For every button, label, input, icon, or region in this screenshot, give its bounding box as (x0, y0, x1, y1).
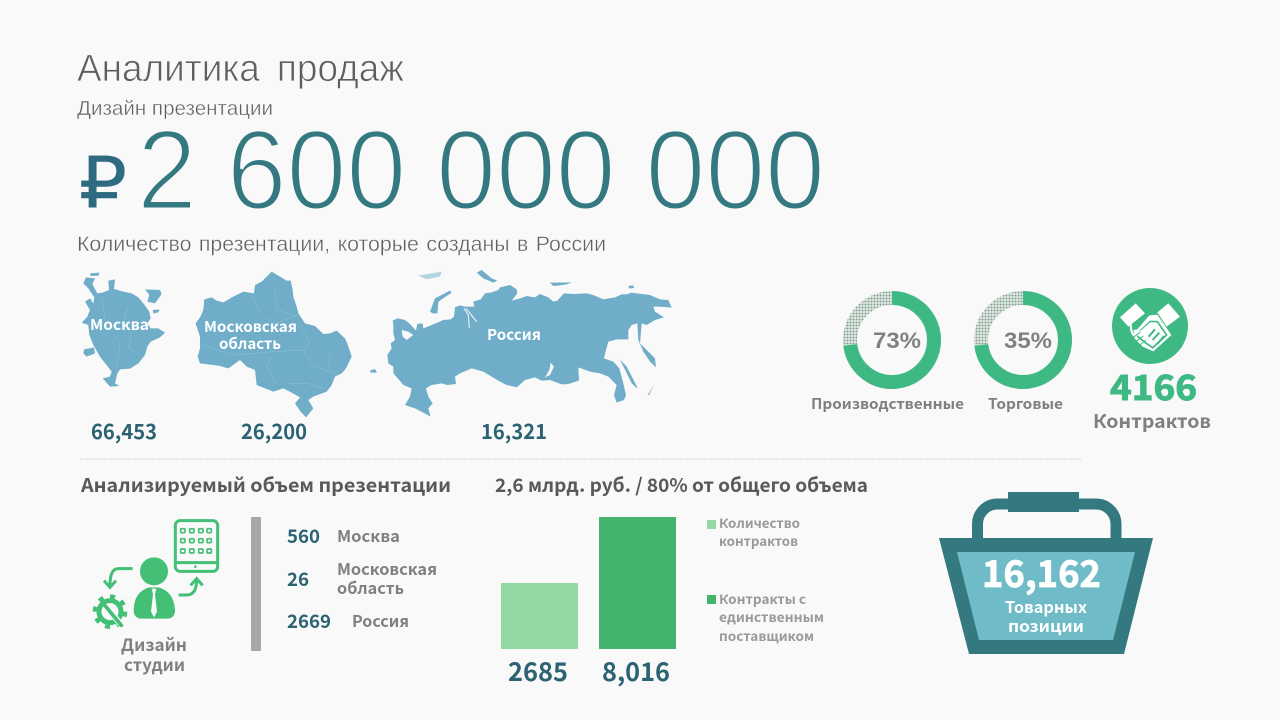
list: volumes: Московская (337, 556, 437, 580)
bar chart: 2685 (508, 652, 568, 689)
value: Russia: 16,321 (481, 416, 547, 446)
donut: 73%: 73% (873, 328, 921, 353)
legend: контрактов (719, 531, 798, 550)
heading: share of total: 2,6 млрд. руб. / 80% от общего объема (495, 471, 868, 498)
donut: 73% (850, 298, 934, 382)
vertical bar (251, 517, 261, 651)
basket: 16,162 (982, 544, 1101, 598)
donut: 35%: 35% (1004, 328, 1052, 353)
map: Moscow (82, 273, 165, 387)
list: volumes: область (337, 575, 404, 599)
icon: ruble sign: ₽ (79, 142, 127, 224)
label: trade: Торговые (988, 393, 1063, 414)
donut: 35% (981, 298, 1065, 382)
list: volumes (287, 522, 437, 634)
list: volumes: Москва (337, 523, 400, 547)
map: Moscow region (196, 272, 352, 417)
title: Аналитика продаж (77, 48, 405, 90)
big number: 2 600 000 000 (137, 107, 825, 233)
label: Moscow: Москва (90, 314, 149, 335)
label: design studio (121, 631, 187, 676)
bar chart (501, 517, 676, 689)
subtitle: Дизайн презентации (77, 98, 273, 120)
label: Moscow region: Московская (204, 316, 297, 337)
list: volumes: 560 (287, 522, 320, 549)
label: Moscow region (204, 316, 297, 354)
icon: design studio (95, 521, 218, 627)
list: volumes: 26 (287, 565, 309, 592)
label: production: Производственные (811, 393, 964, 414)
legend: единственным (719, 607, 824, 626)
legend: Количество (719, 513, 800, 532)
label: design studio: Дизайн (121, 631, 187, 656)
legend: Контракты с (719, 589, 806, 608)
bar chart: 8,016 (602, 652, 670, 689)
label: Russia: Россия (487, 324, 541, 345)
contracts number: 4166 (1110, 360, 1197, 411)
legend: поставщиком (719, 626, 814, 645)
basket: позиции (1008, 613, 1084, 637)
basket: Товарных (1005, 594, 1087, 618)
list: volumes: Россия (352, 608, 409, 632)
map: Russia (370, 270, 672, 417)
legend (707, 513, 824, 645)
label: design studio: студии (124, 651, 185, 676)
list: volumes: 2669 (287, 607, 331, 634)
value: Moscow: 66,453 (91, 416, 157, 446)
basket (939, 492, 1153, 654)
heading: analysed volume: Анализируемый объем презентации (80, 471, 451, 498)
contracts label: Контрактов (1093, 407, 1211, 434)
icon: handshake (1112, 288, 1188, 364)
label: Moscow region: область (219, 333, 281, 354)
value: Moscow region: 26,200 (241, 416, 307, 446)
description: Количество презентации, которые созданы в России (77, 233, 606, 256)
